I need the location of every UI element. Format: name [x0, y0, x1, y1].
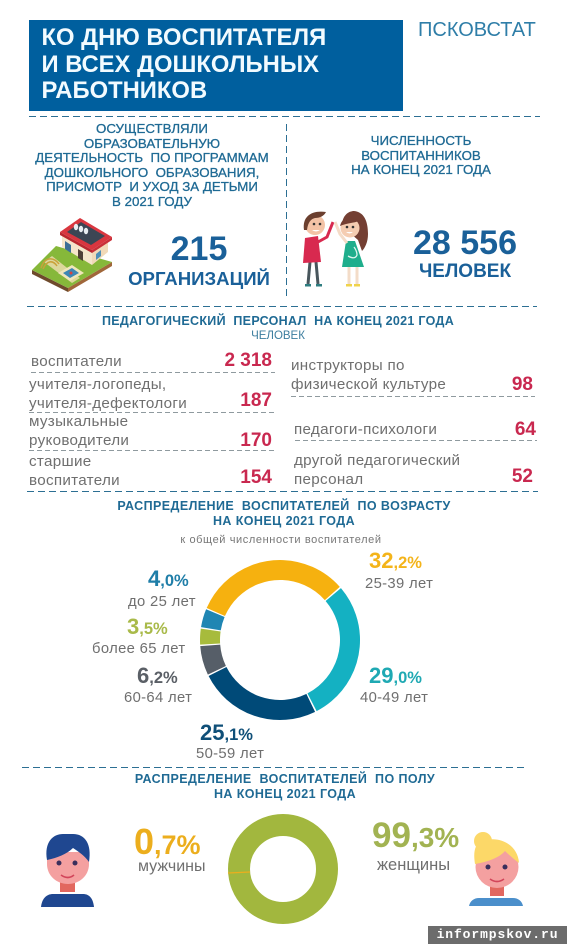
- organisations heading: ОСУЩЕСТВЛЯЛИ: [96, 121, 208, 136]
- gender heading: НА КОНЕЦ 2021 ГОДА: [214, 787, 356, 801]
- value: 0,7%: 0,7%: [134, 821, 201, 862]
- staff row: другой: [294, 452, 533, 488]
- staff row: логопеды: [29, 376, 272, 412]
- value: 154: [240, 467, 272, 488]
- title: И ВСЕХ ДОШКОЛЬНЫХ: [42, 50, 319, 78]
- age label: 4,0: [128, 566, 196, 610]
- pupils heading: ВОСПИТАННИКОВ: [361, 148, 481, 162]
- value: 3,5%: [127, 614, 168, 639]
- value: 29,0%: [369, 663, 422, 688]
- age subheading: к общей численности воспитателей: [180, 534, 382, 546]
- unit: организаций: ОРГАНИЗАЦИЙ: [128, 268, 270, 289]
- pupils heading: НА КОНЕЦ 2021 ГОДА: [351, 162, 491, 177]
- value: 4,0%: [148, 566, 189, 591]
- age label: 3,5: [92, 614, 186, 657]
- age: 50-59 лет: [196, 746, 264, 762]
- number: 28 556: 28 556: [413, 224, 517, 262]
- gender heading: РАСПРЕДЕЛЕНИЕ ВОСПИТАТЕЛЕЙ ПО ПОЛУ: [135, 772, 435, 786]
- value: 64: [515, 419, 536, 440]
- age: 60-64 лет: [124, 690, 192, 706]
- age: 40-49 лет: [360, 690, 428, 706]
- staff row: инструкторы: [291, 357, 533, 395]
- label: руководители: [29, 432, 129, 449]
- label: другой педагогический: [294, 452, 460, 469]
- label: музыкальные: [29, 413, 128, 430]
- organisations heading: ДЕЯТЕЛЬНОСТЬ ПО ПРОГРАММАМ: [35, 150, 269, 165]
- staff row: воспитатели: [31, 350, 272, 371]
- label: [294, 452, 460, 488]
- age: 25-39 лет: [365, 576, 433, 592]
- label: физической культуре: [291, 376, 446, 393]
- unit: человек: ЧЕЛОВЕК: [419, 261, 511, 282]
- age: до 25 лет: [128, 594, 196, 610]
- title: [42, 24, 326, 104]
- panel: gender distribution: [41, 771, 523, 924]
- label: [29, 413, 129, 449]
- age heading: [117, 498, 451, 528]
- pupils heading: ЧИСЛЕННОСТЬ: [371, 133, 471, 148]
- staff unit: ЧЕЛОВЕК: [251, 330, 305, 342]
- gender heading: [135, 771, 435, 801]
- number: 215: 215: [171, 230, 227, 268]
- icon: woman: [467, 830, 527, 908]
- value: 52: [512, 466, 533, 487]
- label: учителя-дефектологи: [29, 395, 187, 412]
- label: мужчины: мужчины: [138, 858, 206, 875]
- organisations heading: ПРИСМОТР И УХОД ЗА ДЕТЬМИ: [46, 179, 258, 194]
- organisation label: ПСКОВСТАТ: [418, 19, 536, 41]
- age heading: РАСПРЕДЕЛЕНИЕ ВОСПИТАТЕЛЕЙ ПО ВОЗРАСТУ: [117, 499, 451, 513]
- age heading: НА КОНЕЦ 2021 ГОДА: [213, 514, 355, 528]
- staff heading: ПЕДАГОГИЧЕСКИЙ ПЕРСОНАЛ НА КОНЕЦ 2021 ГОДА: [102, 314, 454, 328]
- title banner: [29, 20, 403, 111]
- staff row: старшие: [29, 453, 272, 489]
- donut chart: age: [200, 560, 360, 720]
- label: персонал: [294, 471, 363, 488]
- organisations heading: ОБРАЗОВАТЕЛЬНУЮ: [84, 136, 220, 150]
- donut chart: gender: [228, 814, 338, 924]
- title: КО ДНЮ ВОСПИТАТЕЛЯ: [42, 24, 326, 51]
- organisations heading: ДОШКОЛЬНОГО ОБРАЗОВАНИЯ,: [45, 164, 259, 180]
- panel: organisations: [32, 121, 270, 292]
- label: воспитатели: [29, 472, 120, 489]
- panel: pupils: [303, 133, 517, 286]
- age label: 6,2: [124, 663, 192, 706]
- value: 6,2%: [137, 663, 178, 688]
- icon: kindergarten building: [32, 218, 112, 292]
- staff row: психологи: [294, 419, 536, 440]
- icon: two children high five: [303, 211, 368, 286]
- age: более 65 лет: [92, 641, 186, 657]
- age label: 32,2: [365, 548, 433, 592]
- panel: age distribution: [92, 498, 451, 762]
- label: инструкторы по: [291, 357, 405, 374]
- value: 2 318: [224, 350, 272, 371]
- label: старшие: [29, 453, 92, 470]
- label: воспитатели: [31, 353, 122, 370]
- pupils heading: [351, 133, 491, 177]
- value: 25,1%: [200, 720, 253, 745]
- title: РАБОТНИКОВ: [42, 77, 207, 104]
- organisations heading: [35, 121, 269, 209]
- label: женщины: женщины: [377, 856, 450, 874]
- label: [29, 376, 187, 412]
- label: педагоги-психологи: [294, 421, 437, 438]
- staff row: музыкальные: [29, 413, 272, 451]
- panel: pedagogical staff: [29, 313, 536, 489]
- organisations heading: В 2021 ГОДУ: [112, 194, 192, 208]
- value: 32,2%: [369, 548, 422, 573]
- value: 170: [240, 430, 272, 451]
- age label: 25,1: [196, 720, 264, 762]
- watermark: informpskov.ru: [437, 927, 558, 942]
- value: 187: [240, 390, 272, 411]
- value: 98: [512, 374, 533, 395]
- age label: 29,0: [360, 663, 428, 706]
- value: 99,3%: 99,3%: [372, 816, 459, 855]
- label: [291, 357, 446, 393]
- label: [29, 453, 120, 489]
- label: учителя-логопеды,: [29, 376, 166, 393]
- icon: man: [41, 834, 94, 907]
